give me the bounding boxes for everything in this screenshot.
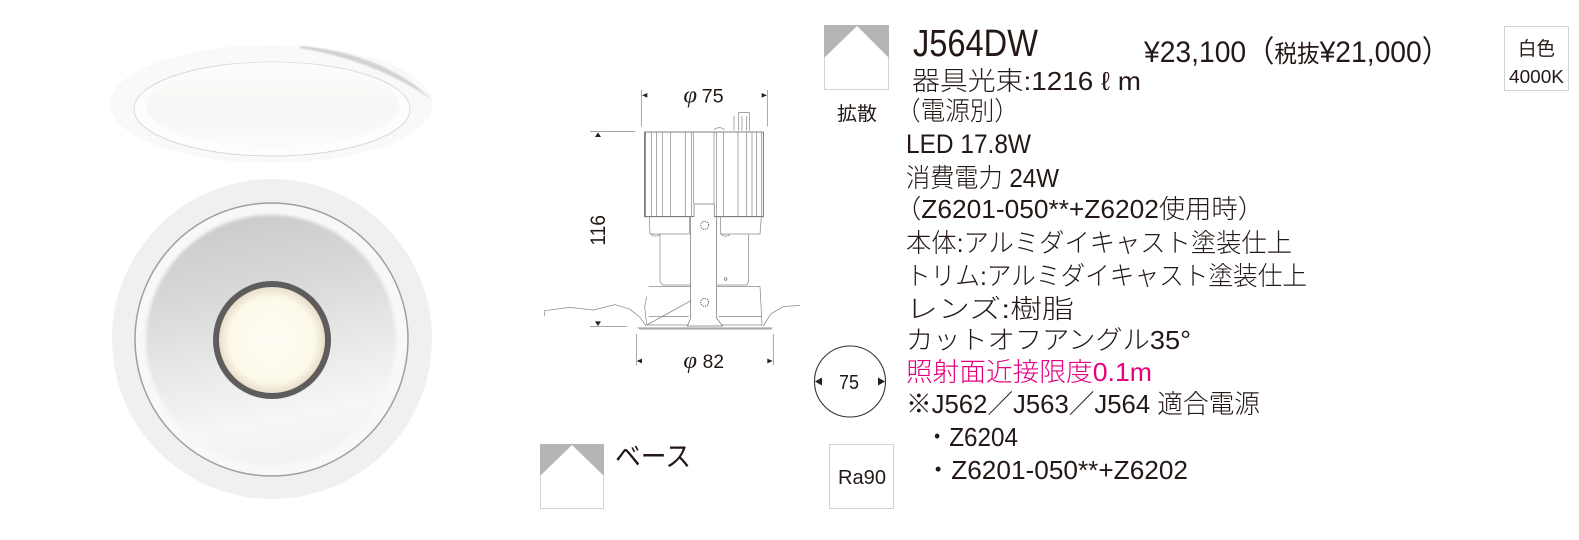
icon: cutout 75: 75 [839, 372, 859, 394]
icon: diffuse light distribution [824, 25, 889, 90]
height 116 dimension: 116 [586, 215, 610, 246]
price: ¥23,100（税抜¥21,000） [1143, 36, 1450, 69]
specification list: カットオフアングル35° [906, 325, 1191, 355]
label: diffuse: 拡散 [837, 103, 877, 125]
badge: colour temperature [1504, 26, 1568, 90]
phi 82 dimension: 82 [703, 352, 724, 373]
icon: base light distribution [540, 444, 604, 508]
phi 82 dimension [636, 334, 773, 374]
specification list: 照射面近接限度0.1m [906, 357, 1152, 387]
dimension drawing: side elevation [545, 82, 800, 374]
phi 75 dimension: 75 [702, 87, 724, 108]
specification list: レンズ:樹脂 [906, 294, 1074, 324]
specification list: 本体:アルミダイキャスト塗装仕上 [906, 228, 1292, 258]
icon: cutout 75 [814, 346, 886, 417]
badge: Ra90: Ra90 [838, 467, 886, 489]
phi 75 dimension: φ [683, 82, 697, 109]
specification list: ・Z6201-050**+Z6202 [925, 455, 1188, 485]
height 116 dimension [586, 132, 635, 327]
specification list: LED 17.8W [906, 129, 1031, 159]
specification list: 器具光束:1216 ℓ m [912, 66, 1141, 96]
specification list: （Z6201-050**+Z6202使用時） [895, 194, 1264, 224]
phi 82 dimension: φ [683, 347, 697, 374]
specification list [895, 66, 1307, 485]
photo: fixture angled view [110, 45, 433, 163]
badge: colour temperature: 4000K [1509, 67, 1564, 87]
specification list: 消費電力 24W [906, 163, 1059, 193]
specification list: （電源別） [896, 96, 1019, 126]
photo: fixture front view [112, 179, 432, 499]
specification list: トリム:アルミダイキャスト塗装仕上 [906, 261, 1307, 291]
fixture body outline [637, 113, 773, 330]
badge: colour temperature: 白色 [1518, 38, 1555, 60]
specification list: ※J562／J563／J564 適合電源 [906, 389, 1260, 419]
badge: Ra90 [830, 444, 894, 508]
phi 75 dimension [641, 82, 767, 127]
label: base: ベース [615, 441, 691, 472]
ceiling section lines [545, 305, 800, 326]
model name: J564DW [913, 23, 1038, 65]
specification list: ・Z6204 [925, 422, 1018, 452]
